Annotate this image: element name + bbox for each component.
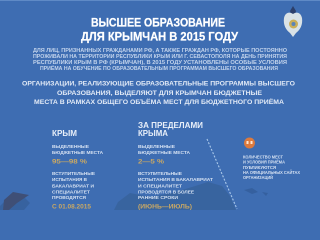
note on publication of places: КОЛИЧЕСТВО МЕСТ bbox=[243, 154, 283, 160]
intro paragraph: ДЛЯ ЛИЦ, ПРИЗНАННЫХ ГРАЖДАНАМИ РФ, А ТАКЖЕ ГРАЖДАН РФ, КОТОРЫЕ ПОСТОЯННО bbox=[33, 48, 287, 54]
emblem bbox=[284, 6, 302, 37]
column: Crimea: 95—98 % bbox=[52, 158, 87, 166]
intro paragraph: ПРИЁМА НА ОБУЧЕНИЕ ПО ОБРАЗОВАТЕЛЬНЫМ ПРОГРАММАМ ВЫСШЕГО ОБРАЗОВАНИЯ bbox=[40, 65, 278, 72]
column: outside Crimea: 2—5 % bbox=[138, 158, 164, 166]
title bbox=[81, 18, 239, 44]
organisations statement: ОРГАНИЗАЦИИ, РЕАЛИЗУЮЩИЕ ОБРАЗОВАТЕЛЬНЫЕ ПРОГРАММЫ ВЫСШЕГО bbox=[22, 82, 295, 88]
organisations statement: МЕСТА В РАМКАХ ОБЩЕГО ОБЪЁМА МЕСТ ДЛЯ БЮДЖЕТНОГО ПРИЁМА bbox=[34, 99, 285, 106]
note on publication of places: НА ОФИЦИАЛЬНЫХ САЙТАХ bbox=[243, 170, 300, 175]
column: Crimea: БАКАЛАВРИАТ И bbox=[52, 184, 95, 190]
column: Crimea: КРЫМ bbox=[52, 129, 77, 138]
column: outside Crimea: КРЫМА bbox=[138, 129, 168, 138]
column: outside Crimea: ПРОВОДЯТСЯ В БОЛЕЕ bbox=[138, 190, 195, 196]
intro paragraph: РЕСПУБЛИКИ КРЫМ В РФ (КРЫМЧАН), В 2015 ГОДУ УСТАНОВЛЕНЫ ОСОБЫЕ УСЛОВИЯ bbox=[33, 60, 287, 66]
note on publication of places: ОРГАНИЗАЦИЙ bbox=[243, 175, 273, 180]
column: Crimea: ПРОВОДЯТСЯ bbox=[52, 195, 87, 201]
note on publication of places: И УСЛОВИЯ ПРИЁМА bbox=[243, 160, 285, 164]
organisations statement bbox=[22, 82, 295, 106]
intro paragraph: ПРОЖИВАЛИ НА ТЕРРИТОРИИ РЕСПУБЛИКИ КРЫМ ИЛИ Г. СЕВАСТОПОЛЯ НА ДЕНЬ ПРИНЯТИЯ bbox=[33, 54, 287, 60]
column: outside Crimea: БЮДЖЕТНЫЕ МЕСТА bbox=[138, 150, 191, 156]
column: Crimea: БЮДЖЕТНЫЕ МЕСТА bbox=[52, 150, 104, 156]
column: Crimea: ИСПЫТАНИЯ В bbox=[52, 177, 88, 183]
title: ДЛЯ КРЫМЧАН В 2015 ГОДУ bbox=[81, 32, 239, 44]
map: coastline at the bottom bbox=[0, 182, 268, 210]
intro paragraph bbox=[33, 48, 287, 72]
column: Crimea: СПЕЦИАЛИТЕТ bbox=[52, 190, 90, 196]
column: Crimea: ВСТУПИТЕЛЬНЫЕ bbox=[52, 171, 96, 177]
note on publication of places: ПУБЛИКУЮТСЯ bbox=[243, 165, 276, 170]
dashed route line bbox=[207, 139, 237, 209]
note on publication of places bbox=[243, 154, 300, 180]
column: Crimea: ВЫДЕЛЕННЫЕ bbox=[52, 144, 90, 150]
column: outside Crimea: ИСПЫТАНИЯ В БАКАЛАВРИАТ bbox=[138, 177, 213, 183]
column: outside Crimea bbox=[138, 121, 213, 210]
column: outside Crimea: ВСТУПИТЕЛЬНЫЕ bbox=[138, 171, 183, 177]
title: ВЫСШЕЕ ОБРАЗОВАНИЕ bbox=[91, 18, 225, 30]
column: outside Crimea: РАННИЕ СРОКИ bbox=[138, 195, 179, 201]
organisations statement: ОБРАЗОВАНИЯ, ВЫДЕЛЯЮТ ДЛЯ КРЫМЧАН БЮДЖЕТНЫЕ bbox=[57, 91, 262, 97]
icon: orange badge bbox=[244, 138, 255, 148]
column: outside Crimea: ЗА ПРЕДЕЛАМИ bbox=[138, 121, 203, 130]
column: Crimea bbox=[52, 129, 104, 210]
column: outside Crimea: ВЫДЕЛЕННЫЕ bbox=[138, 144, 176, 150]
column: outside Crimea: И СПЕЦИАЛИТЕТ bbox=[138, 184, 182, 190]
